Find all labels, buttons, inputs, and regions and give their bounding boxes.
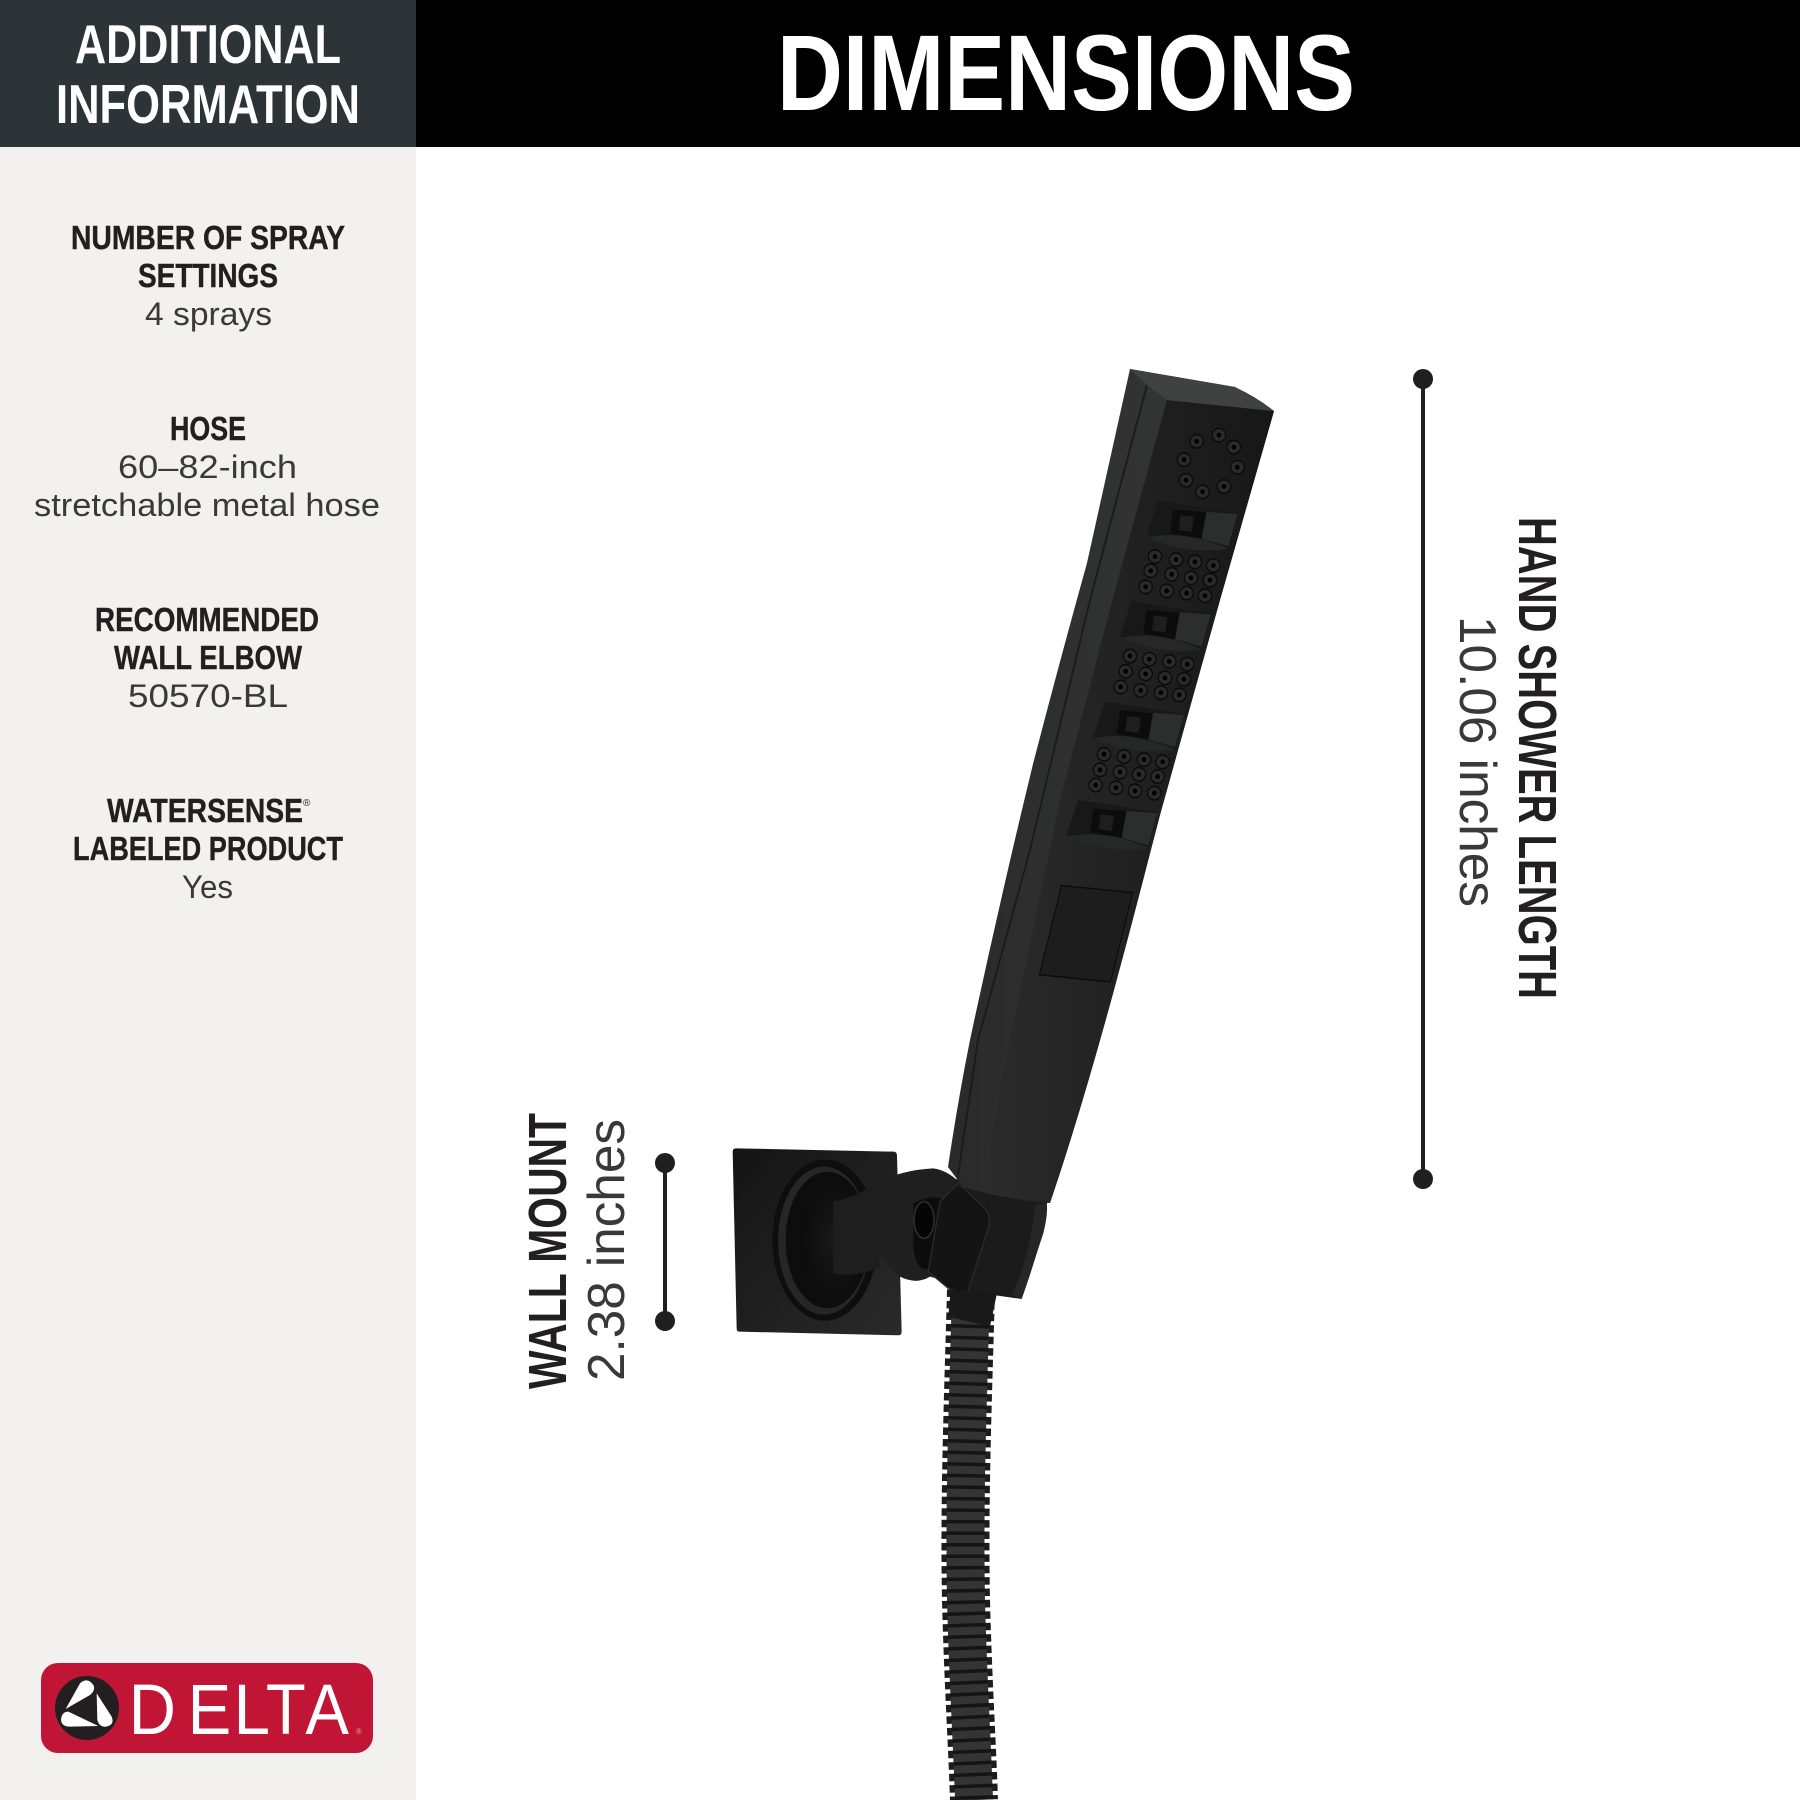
spec: recommended wall elbow: RECOMMENDED <box>95 601 319 638</box>
spray selector switches <box>1067 501 1237 850</box>
spec: number of spray settings: SETTINGS <box>138 257 278 294</box>
spec: hose <box>34 410 380 523</box>
dimension: wall mount <box>518 1113 675 1389</box>
spec: watersense labeled product: LABELED PRODUCT <box>73 830 343 867</box>
spec: recommended wall elbow <box>95 601 319 714</box>
wall mount <box>733 1148 1048 1335</box>
hose <box>965 1290 974 1800</box>
swivel joint <box>860 1168 967 1287</box>
dimension: hand shower length <box>1413 369 1567 1189</box>
heading: additional information <box>0 0 416 147</box>
spec: hose: 60–82-inch <box>118 449 297 485</box>
handle top face <box>1130 369 1274 411</box>
logo: delta <box>41 1663 373 1753</box>
logo: delta: ® <box>356 1727 362 1736</box>
square button <box>1039 886 1133 982</box>
spec: number of spray settings: 4 sprays <box>145 296 272 332</box>
title bar: dimensions <box>416 0 1800 147</box>
heading: additional information: INFORMATION <box>56 73 360 135</box>
spec: recommended wall elbow: 50570-BL <box>128 678 288 714</box>
spec: watersense labeled product <box>73 792 343 905</box>
spec: number of spray settings <box>71 219 345 332</box>
heading: additional information: ADDITIONAL <box>75 13 341 75</box>
spec: watersense labeled product: ® <box>303 798 311 809</box>
spec: hose: stretchable metal hose <box>34 487 380 523</box>
handle body <box>948 369 1274 1203</box>
spec: watersense labeled product: Yes <box>182 869 233 905</box>
dimension: wall mount: WALL MOUNT <box>518 1113 578 1389</box>
logo: delta: DELTA <box>129 1671 349 1750</box>
spec: hose: HOSE <box>170 410 246 447</box>
holder clip <box>953 1177 1048 1299</box>
panel: additional information sidebar <box>0 0 416 1800</box>
spec: watersense labeled product: WATERSENSE <box>107 792 303 829</box>
ring spray nozzles <box>1177 428 1244 498</box>
dimension: hand shower length: 10.06 inches <box>1448 616 1506 907</box>
spec: number of spray settings: NUMBER OF SPRAY <box>71 219 345 256</box>
spec: recommended wall elbow: WALL ELBOW <box>114 639 303 676</box>
product: hand shower with wall mount and hose <box>733 369 1274 1800</box>
title bar: dimensions: DIMENSIONS <box>777 12 1355 133</box>
nozzle grids <box>1089 550 1220 800</box>
dimension: wall mount: 2.38 inches <box>578 1119 636 1381</box>
dimension: hand shower length: HAND SHOWER LENGTH <box>1507 517 1567 999</box>
